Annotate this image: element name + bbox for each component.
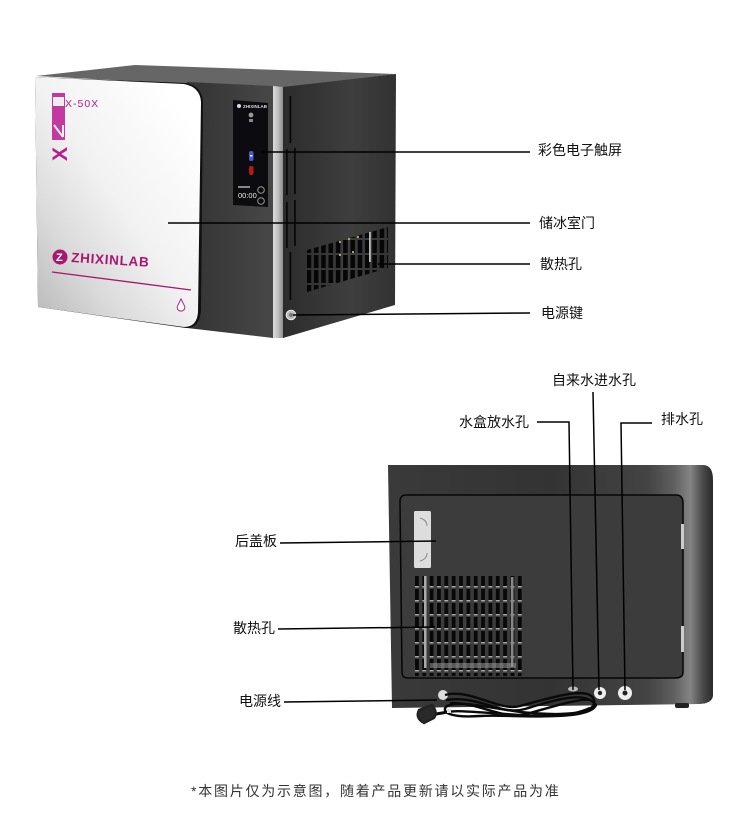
label: color touch screen with leader: 彩色电子触屏 [538, 142, 622, 158]
label: drain with leader: 排水孔 [661, 411, 703, 427]
color touch screen panel: 00:00 [238, 191, 257, 200]
label: tap water inlet with leader: 自来水进水孔 [552, 372, 636, 388]
logo: ZX-50X model mark: X-50X [65, 98, 99, 110]
logo: ZX-50X model mark: X [49, 147, 72, 161]
label: tap water inlet with leader [552, 372, 636, 690]
brand logo: ZHIXINLAB: Z [56, 252, 63, 264]
icon: water drop [177, 299, 185, 311]
brand logo: ZHIXINLAB: ZHIXINLAB [71, 250, 150, 270]
product: ice machine front view [35, 65, 396, 338]
brand logo: ZHIXINLAB [52, 250, 191, 290]
back ventilation grille [415, 576, 522, 676]
label: storage door with leader: 储冰室门 [539, 215, 595, 231]
side ventilation slots [286, 96, 388, 300]
color touch screen panel [233, 100, 268, 207]
back cover plate [400, 495, 684, 678]
label: drain with leader [621, 411, 703, 690]
label: back cover with leader: 后盖板 [235, 533, 277, 549]
power button [286, 310, 296, 320]
power port [438, 690, 448, 700]
tap water inlet [594, 687, 606, 699]
label: water box drain with leader: 水盒放水孔 [459, 414, 529, 430]
label: water box drain with leader [459, 414, 573, 690]
label: vents with leader: 散热孔 [540, 256, 582, 272]
foot [675, 703, 689, 708]
label: power key with leader: 电源键 [541, 305, 583, 321]
water box drain port [568, 686, 578, 692]
footnote: *本图片仅为示意图，随着产品更新请以实际产品为准 [191, 783, 560, 799]
color touch screen panel: ZHIXINLAB [243, 104, 268, 109]
power cord with plug [418, 693, 596, 723]
logo: ZX-50X model mark [49, 93, 99, 161]
product: ice machine back view [388, 465, 713, 708]
storage door [35, 77, 203, 328]
drain port [618, 686, 632, 700]
label: back vents with leader: 散热孔 [233, 620, 275, 636]
label: power cord with leader: 电源线 [239, 693, 281, 709]
